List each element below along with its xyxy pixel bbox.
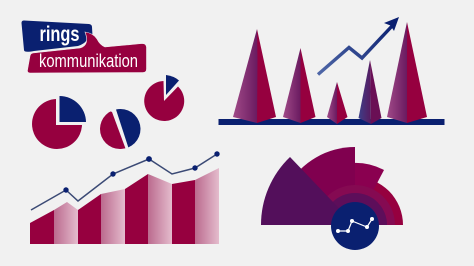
sector 4 [355,177,403,225]
pie chart: split [100,109,140,149]
logo: navy bubble [22,20,92,52]
line chart [31,151,220,210]
logo [22,20,146,73]
pyramid 5 [387,22,427,123]
navy circle [331,202,379,250]
pyramid 3 [327,82,348,124]
logo text: kommunikation: kommunikation [39,51,138,71]
logo: crimson bubble [27,32,146,73]
pie chart: large [32,96,86,149]
sector 1 [261,157,355,225]
ring outer [328,185,395,225]
pyramid 2 [283,48,316,123]
sector 3 [344,163,384,225]
pie chart: small wedge [144,75,184,121]
ring inner [333,193,387,225]
bar chart [30,168,219,244]
pyramid chart baseline [218,119,444,125]
arrow [318,17,399,74]
sector 2 [288,147,355,225]
pyramid 4 [358,60,382,124]
fan chart [261,147,403,250]
pyramid 1 [233,29,276,123]
logo text: rings: rings [40,23,80,46]
mini line chart icon [336,217,374,233]
